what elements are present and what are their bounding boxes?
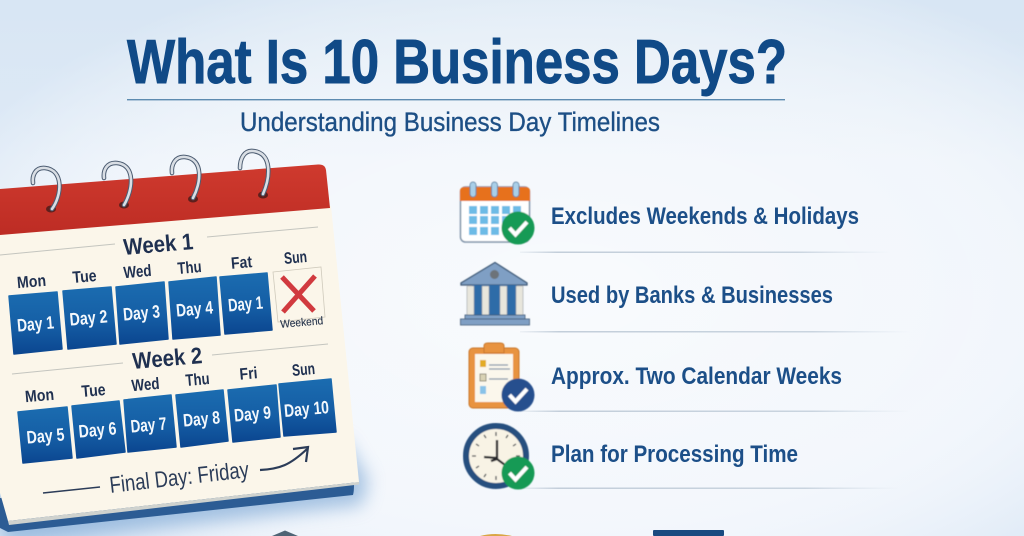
label: Used by Banks & Businesses — [551, 282, 833, 309]
week 2 day names: Fri — [239, 364, 258, 384]
weekend cell — [273, 267, 325, 331]
heading: week 2: Week 2 — [131, 342, 203, 374]
cropped bottom icons — [272, 530, 724, 536]
week 2 tile labels: Day 5 — [26, 424, 65, 448]
week 2 day names: Mon — [24, 386, 55, 406]
week 2 day names: Thu — [185, 370, 210, 390]
icon: calendar with check — [460, 182, 534, 244]
list separators — [520, 252, 910, 489]
final day line — [43, 487, 100, 493]
week 2 tile labels: Day 8 — [182, 407, 221, 431]
calendar back cover — [0, 470, 354, 532]
week 1 tile labels: Day 1 — [16, 312, 55, 336]
item: used by banks and businesses — [460, 262, 833, 325]
week 2 tiles — [18, 379, 336, 463]
binder rings — [33, 151, 268, 212]
week 2 tile labels: Day 10 — [283, 397, 330, 421]
icon fragment: orange top — [480, 534, 512, 536]
week 1 day names: Mon — [16, 272, 47, 292]
item: approx two calendar weeks — [469, 343, 842, 412]
final day label: Final Day: Friday — [108, 456, 251, 498]
week 1 tile labels: Day 4 — [175, 297, 214, 321]
week 1 day names: Fat — [230, 253, 253, 273]
week rules — [0, 227, 328, 374]
week 1 tile labels: Day 1 — [227, 293, 264, 316]
week 1 day names: Sun — [283, 248, 308, 268]
week 2 tile labels: Day 6 — [78, 418, 117, 442]
calendar — [0, 151, 368, 536]
week 2 tile labels — [26, 397, 330, 448]
icon fragment: grey roof — [272, 530, 298, 536]
calendar shadow — [0, 440, 368, 536]
calendar paper edge — [8, 482, 359, 525]
week 2 day names: Wed — [131, 375, 160, 395]
label: Plan for Processing Time — [551, 441, 798, 468]
title: What Is 10 Business Days? — [127, 28, 787, 97]
icon fragment: navy box — [653, 530, 724, 536]
week 1 day names — [16, 248, 308, 292]
week 1 day names: Wed — [123, 262, 152, 282]
label: Excludes Weekends & Holidays — [551, 203, 859, 230]
week 1 tile labels: Day 2 — [69, 306, 108, 330]
week 2 tile labels: Day 9 — [233, 402, 272, 426]
red cross — [282, 276, 315, 312]
calendar red header — [0, 164, 330, 235]
label: Approx. Two Calendar Weeks — [551, 363, 842, 390]
week 1 tile labels: Day 3 — [122, 301, 161, 325]
title underline — [127, 99, 785, 100]
item: excludes weekends and holidays — [460, 182, 859, 244]
week 1 day names: Tue — [72, 267, 97, 287]
week 2 day names: Tue — [81, 381, 106, 401]
subtitle: Understanding Business Day Timelines — [240, 107, 660, 137]
week 2 day names — [24, 360, 316, 406]
icon: bank building — [460, 262, 530, 325]
weekend label: Weekend — [280, 315, 324, 331]
item: plan for processing time — [466, 426, 798, 490]
icon: clipboard with check — [469, 343, 534, 412]
calendar paper — [0, 206, 359, 521]
week 2 day names: Sun — [291, 360, 316, 380]
week 1 tiles — [9, 273, 272, 354]
week 1 tile labels — [16, 293, 264, 336]
week 2 tile labels: Day 7 — [130, 413, 167, 437]
icon: clock with check — [466, 426, 534, 490]
heading: week 1: Week 1 — [122, 228, 194, 260]
week 1 day names: Thu — [177, 258, 202, 278]
arrow to day 10 — [260, 447, 308, 470]
